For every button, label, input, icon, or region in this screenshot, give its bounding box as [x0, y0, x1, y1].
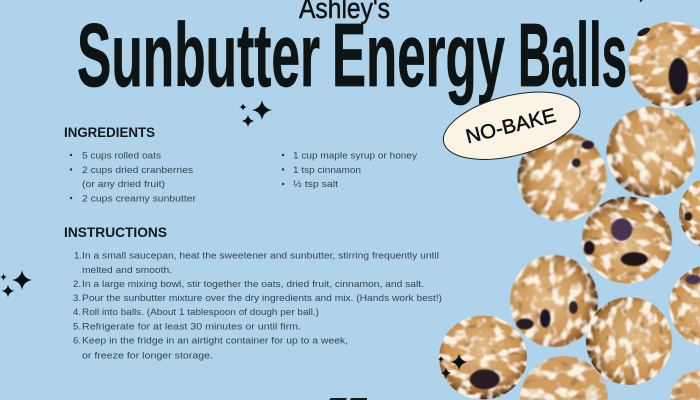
ball 10 [657, 253, 700, 359]
ingredients column 2 [282, 150, 417, 190]
instructions list: melted and smooth. [82, 265, 172, 276]
instructions list: 3. [73, 293, 81, 304]
sparkle top right [637, 0, 645, 3]
instructions list: or freeze for longer storage. [82, 350, 213, 362]
instructions list: Keep in the fridge in an airtight container for up to a week, [82, 336, 348, 346]
sparkles over ball [438, 354, 468, 378]
ball 6 [494, 238, 614, 364]
ingredients column 1: 5 cups rolled oats [82, 150, 161, 162]
energy balls photo group [427, 22, 700, 400]
instructions list: In a small saucepan, heat the sweetener and sunbutter, stirring frequently until [82, 250, 439, 262]
instructions list: Refrigerate for at least 30 minutes or until firm. [82, 322, 301, 332]
ball 11 [670, 369, 700, 400]
no-bake badge [437, 80, 587, 172]
ingredients column 1: 2 cups creamy sunbutter [82, 194, 197, 204]
logo fragment bottom [329, 398, 367, 400]
instructions list: 6. [73, 336, 81, 346]
instructions list [73, 250, 442, 362]
ingredients column 1 [70, 150, 197, 204]
title: Energy [332, 6, 505, 106]
instructions list: 4. [73, 307, 81, 318]
ingredients column 2: 1 tsp cinnamon [293, 165, 361, 176]
ball 4 [566, 181, 688, 299]
sparkles near title [239, 100, 272, 127]
ingredients heading: INGREDIENTS [64, 125, 155, 140]
no-bake badge: NO-BAKE [464, 105, 558, 148]
ball 2 [594, 94, 700, 210]
ingredients column 1: (or any dried fruit) [82, 179, 165, 190]
ingredients column 2: 1 cup maple syrup or honey [293, 150, 417, 162]
instructions list: 2. [73, 279, 81, 290]
instructions list: 1. [74, 250, 82, 262]
ingredients column 1: 2 cups dried cranberries [82, 165, 193, 176]
instructions heading: INSTRUCTIONS [64, 225, 167, 240]
ingredients column 2: ½ tsp salt [293, 179, 338, 190]
ball 9 [520, 356, 608, 400]
ball 1 [628, 22, 700, 108]
ball 8 [427, 304, 539, 400]
ball 3 [501, 116, 623, 238]
instructions list: Roll into balls. (About 1 tablespoon of dough per ball.) [82, 307, 319, 318]
ball 7 [574, 285, 684, 397]
instructions list: In a large mixing bowl, stir together the oats, dried fruit, cinnamon, and salt. [82, 279, 424, 290]
instructions list: 5. [73, 322, 81, 332]
ball 5 [666, 162, 700, 264]
instructions list: Pour the sunbutter mixture over the dry ingredients and mix. (Hands work best!) [82, 293, 442, 304]
title: Sunbutter [77, 6, 320, 106]
sparkles left [0, 270, 32, 297]
